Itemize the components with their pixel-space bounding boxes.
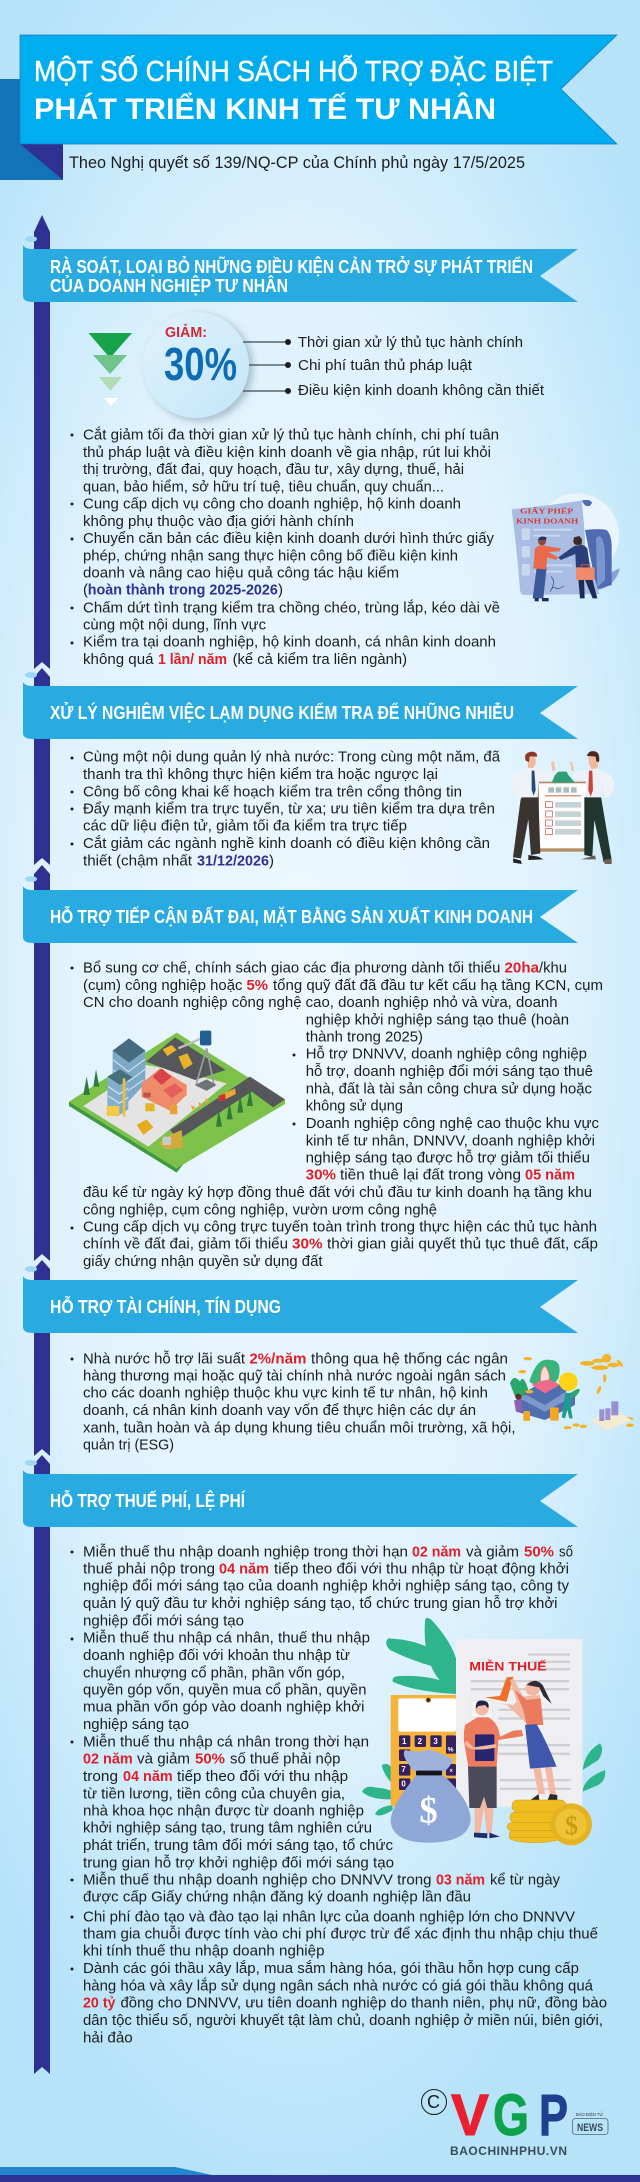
section 3 text block: nghiệp khởi nghiệp sáng tạo thuê (hoàn	[306, 1011, 569, 1028]
illustration: tax exemption: 0	[401, 1780, 406, 1789]
section 1 text block: không quá	[83, 651, 154, 668]
section 2 text block: Cắt giảm các ngành nghề kinh doanh có điều kiện không cần	[83, 835, 490, 852]
section 1 text block: Chuyển căn bản các điều kiện kinh doanh dưới hình thức giấy	[83, 530, 494, 547]
title ribbon	[0, 35, 617, 180]
section 3 text block	[70, 959, 603, 1270]
section 3 text block: chính về đất đai, giảm tối thiểu	[83, 1236, 288, 1253]
section 5 text block: 03 năm	[436, 1871, 485, 1888]
section 2 text block: )	[269, 852, 274, 869]
section 1 text block	[70, 427, 500, 668]
section 5 text block: nghiệp đổi mới sáng tạo	[83, 1612, 244, 1629]
section 5 text block: mua phần vốn góp vào doanh nghiệp khởi	[83, 1699, 364, 1716]
section 2 text block: Cùng một nội dung quản lý nhà nước: Trong cùng một năm, đã	[83, 749, 501, 766]
section 3 text block: (cụm) công nghiệp hoặc	[83, 977, 243, 994]
section 4 banner: HỖ TRỢ TÀI CHÍNH, TÍN DỤNG	[50, 1296, 281, 1317]
section 5 text block: từ tiền lương, tiền công của chuyên gia,	[83, 1785, 345, 1802]
section 5 text block: Miễn thuế thu nhập cá nhân, thuế thu nhập	[83, 1630, 370, 1647]
section 1 text block: quan, bảo hiểm, sở hữu trí tuệ, tiêu chuẩn, quy chuẩn...	[83, 478, 444, 495]
title ribbon: MỘT SỐ CHÍNH SÁCH HỖ TRỢ ĐẶC BIỆT	[34, 54, 553, 88]
illustration: tax exemption: $	[565, 1811, 578, 1840]
section 4 text block: thông qua hệ thống các ngân	[311, 1350, 508, 1367]
reduction list: Thời gian xử lý thủ tục hành chính	[298, 334, 523, 351]
section 2 text block: 31/12/2026	[197, 852, 269, 869]
section 5 banner: HỖ TRỢ THUẾ PHÍ, LỆ PHÍ	[50, 1490, 246, 1511]
section 5 text block: tiếp theo đối với thu nhập	[177, 1768, 348, 1785]
section 3 text block: thời gian giải quyết thủ tục thuê đất, cấp	[327, 1236, 598, 1253]
section 2 banner: XỬ LÝ NGHIÊM VIỆC LẠM DỤNG KIỂM TRA ĐỂ NHŨNG NHIỄU	[50, 702, 514, 723]
section 1 text block: 1 lần/ năm	[158, 651, 227, 668]
section 4 text block: doanh, cá nhân kinh doanh vay vốn để thực hiện các dự án	[83, 1402, 476, 1419]
section 5 text block: 02 năm	[83, 1751, 133, 1768]
section 5 text block: doanh nghiệp đối với khoản thu nhập từ	[83, 1647, 350, 1664]
section 5 text block: 04 năm	[123, 1768, 173, 1785]
section 3 text block: Cung cấp dịch vụ công trực tuyến toàn trình trong thực hiện các thủ tục hành	[83, 1219, 597, 1236]
callout: giảm 30%: 30%	[164, 338, 237, 390]
icon: green descending triangles	[88, 333, 132, 406]
section 5 text block: 50%	[195, 1751, 225, 1768]
logo: VGP News: P	[539, 2083, 568, 2148]
section 5 text block: trong	[83, 1768, 118, 1785]
section 5 text block: khởi nghiệp sáng tạo, trung tâm nghiên cứu	[83, 1820, 372, 1837]
callout: giảm 30%	[143, 312, 253, 421]
section 3 text block: 5%	[246, 977, 268, 994]
section 5 text block: thuế phải nộp trong	[83, 1560, 215, 1577]
section 4 text block: hàng thương mại hoặc quỹ tài chính nhà nước ngoài ngân sách	[83, 1368, 506, 1385]
section 3 text block: không sử dụng	[306, 1098, 403, 1115]
section 4 text block: cho các doanh nghiệp thuộc khu vực kinh tế tư nhân, hộ kinh	[83, 1385, 488, 1402]
section 5 text block: và giảm	[137, 1751, 190, 1768]
section 3 text block: /khu	[539, 959, 567, 976]
logo: VGP News: NEWS	[577, 2122, 603, 2134]
section 5 text block: đồng cho DNNVV, ưu tiên doanh nghiệp do thanh niên, phụ nữ, đồng bào	[120, 1995, 607, 2012]
section 3 text block: đầu kể từ ngày ký hợp đồng thuê đất với chủ đầu tư kinh doanh hạ tầng khu	[83, 1184, 592, 1201]
illustration: business licence handshake	[512, 493, 620, 601]
section 5 text block: Chi phí đào tạo và đào tạo lại nhân lực của doanh nghiệp lớn cho DNNVV	[83, 1908, 575, 1925]
section 3 text block: 30%	[306, 1167, 336, 1184]
section 1 text block: doanh và nâng cao hiệu quả công tác hậu kiểm	[83, 565, 399, 582]
illustration: two men with checklist	[511, 751, 614, 864]
logo: VGP News: C	[427, 2092, 440, 2112]
section 4 text block: 2%/năm	[249, 1350, 306, 1367]
section 5 text block: chuyển nhượng cổ phần, phần vốn góp,	[83, 1664, 345, 1681]
section 5 text block: dân tộc thiểu số, người khuyết tật làm chủ, doanh nghiệp ở miền núi, biên giới,	[83, 2012, 603, 2029]
section 5 text block: tiếp theo đối với thu nhập từ hoạt động khởi	[274, 1560, 569, 1577]
section 3 text block: 20ha	[504, 959, 540, 976]
section 3 text block: nghiệp sáng tạo được hỗ trợ giảm tối thiểu	[306, 1150, 590, 1167]
section 3 text block: CN cho doanh nghiệp công nghệ cao, doanh nghiệp nhỏ và vừa, doanh	[83, 994, 558, 1011]
reduction list	[243, 334, 545, 399]
section 5 text block: quyền góp vốn, quyền mua cổ phần, quyền	[83, 1681, 366, 1698]
section 5 text block: Miễn thuế thu nhập cá nhân trong thời hạn	[83, 1733, 369, 1750]
section 5 text block: khi tính thuế thu nhập doanh nghiệp	[83, 1943, 324, 1960]
section 5 text block: tham gia chuỗi được tính vào chi phí được trừ để xác định thu nhập chịu thuế	[83, 1926, 599, 1943]
section 3 text block: tiền thuê lại đất trong vòng	[340, 1167, 521, 1184]
illustration: tax exemption: 3	[433, 1737, 438, 1746]
section 2 text block	[70, 749, 501, 869]
section 3 text block: giấy chứng nhận quyền sử dụng đất	[83, 1253, 323, 1270]
section 5 text block: nghiệp đổi mới sáng tạo của doanh nghiệp khởi nghiệp sáng tạo, công ty	[83, 1578, 569, 1595]
section 2 text block: Công bố công khai kế hoạch kiểm tra trên cổng thông tin	[83, 783, 462, 800]
section 3 text block: tổng quỹ đất đã đầu tư kết cấu hạ tầng KCN, cụm	[273, 977, 603, 994]
section 1 text block: cùng một nội dung, lĩnh vực	[83, 617, 266, 634]
section 1 text block: thủ pháp luật và điều kiện kinh doanh về gia nhập, rút lui khỏi	[83, 444, 491, 461]
section 5 text block: kể từ ngày	[490, 1871, 560, 1888]
illustration: tax exemption	[362, 1618, 605, 1845]
section 1 text block: không phụ thuộc vào địa giới hành chính	[83, 513, 354, 530]
section 5 text block: trung gian hỗ trợ khởi nghiệp đối mới sáng tạo	[83, 1854, 394, 1871]
reduction list: Điều kiện kinh doanh không cần thiết	[298, 382, 545, 399]
section 5 text block	[70, 1543, 607, 2046]
section 2 text block: các dữ liệu điện tử, giảm tối đa kiểm tra trực tiếp	[83, 818, 407, 835]
illustration: tax exemption: %	[448, 1747, 454, 1754]
section 4 text block: xanh, tuần hoàn và áp dụng khung tiêu chuẩn môi trường, xã hội,	[83, 1419, 516, 1436]
section 5 text block: Miễn thuế thu nhập doanh nghiệp cho DNNVV trong	[83, 1871, 432, 1888]
section 1 text block: phép, chứng nhận sang thực hiện công bố điều kiện kinh	[83, 547, 458, 564]
section 2 text block: thiết (chậm nhất	[83, 852, 193, 869]
illustration: construction site	[69, 1031, 285, 1173]
illustration: tax exemption: 7	[401, 1765, 406, 1774]
section 5 text block: 50%	[524, 1543, 554, 1560]
section 4 banner	[23, 1266, 578, 1333]
logo: VGP News: V	[451, 2083, 489, 2148]
section 2 text block: thanh tra thì không thực hiện kiểm tra hoặc ngược lại	[83, 766, 438, 783]
logo: VGP News: G	[493, 2083, 529, 2148]
section 1 text block: (	[83, 582, 88, 599]
section 4 text block: quản trị (ESG)	[83, 1437, 174, 1454]
section 5 text block: số	[559, 1543, 574, 1560]
section 1 text block: Chấm dứt tình trạng kiểm tra chồng chéo, trùng lắp, kéo dài về	[83, 599, 500, 616]
section 1 banner	[23, 236, 578, 302]
illustration: tax exemption: 2	[418, 1737, 423, 1746]
section 3 text block: kinh tế tư nhân, DNNVV, doanh nghiệp khởi	[306, 1132, 595, 1149]
footer band	[0, 2167, 640, 2182]
section 2 text block: Đẩy mạnh kiểm tra trực tuyến, từ xa; ưu tiên kiểm tra dựa trên	[83, 800, 495, 817]
section 1 text block: (kể cả kiểm tra liên ngành)	[233, 651, 407, 668]
logo: VGP News: BAOCHINHPHU.VN	[450, 2144, 567, 2158]
section 5 text block: hàng hóa và xây lắp sử dụng ngân sách nhà nước có giá gói thầu không quá	[83, 1977, 594, 1994]
title ribbon: PHÁT TRIỂN KINH TẾ TƯ NHÂN	[34, 92, 496, 126]
illustration: business licence handshake: KINH DOANH	[516, 517, 578, 526]
illustration: tax exemption: 1	[402, 1737, 407, 1746]
section 1 text block: thị trường, đất đai, quy hoạch, đầu tư, xây dựng, thuế, hải	[83, 461, 464, 478]
section 5 text block: được cấp Giấy chứng nhận đăng ký doanh nghiệp lần đầu	[83, 1889, 471, 1906]
section 5 text block: nghiệp sáng tạo	[83, 1716, 189, 1733]
section 3 text block: công nghiệp, cụm công nghiệp, vườn ươm công nghệ	[83, 1201, 437, 1218]
section 1 banner: RÀ SOÁT, LOẠI BỎ NHỮNG ĐIỀU KIỆN CẢN TRỞ SỰ PHÁT TRIỂN	[50, 256, 533, 277]
section 5 text block: 02 năm	[412, 1543, 461, 1560]
timeline bar	[34, 215, 50, 2074]
section 4 text block	[70, 1350, 516, 1454]
illustration: business licence handshake: GIẤY PHÉP	[520, 505, 574, 515]
section 3 text block: thành trong 2025)	[306, 1029, 423, 1046]
section 5 banner	[23, 1460, 578, 1527]
logo: VGP News: BÁO ĐIỆN TỬ	[576, 2110, 603, 2117]
section 5 text block: nhà khoa học nhận được từ doanh nghiệp	[83, 1802, 364, 1819]
section 3 text block: 05 năm	[525, 1167, 575, 1184]
section 4 text block: Nhà nước hỗ trợ lãi suất	[83, 1350, 246, 1367]
section 5 text block: hải đảo	[83, 2029, 133, 2046]
section 1 text block: hoàn thành trong 2025-2026	[88, 582, 278, 599]
illustration: tax exemption: $	[419, 1790, 438, 1831]
section 1 text block: )	[278, 582, 283, 599]
section 1 text block: Cắt giảm tối đa thời gian xử lý thủ tục hành chính, chi phí tuân	[83, 427, 499, 444]
section 5 text block: quản lý quỹ đầu tư khởi nghiệp sáng tạo, tổ chức trung gian hỗ trợ khởi	[83, 1595, 558, 1612]
section 3 text block: hỗ trợ, doanh nghiệp đổi mới sáng tạo thuê	[306, 1063, 593, 1080]
callout: giảm 30%: GIẢM:	[165, 324, 207, 341]
reduction list: Chi phí tuân thủ pháp luật	[298, 357, 473, 374]
section 2 banner	[23, 672, 578, 739]
section 3 banner	[23, 876, 578, 943]
section 5 text block: 20 tỷ	[83, 1995, 116, 2012]
section 1 text block: Cung cấp dịch vụ công cho doanh nghiệp, hộ kinh doanh	[83, 496, 461, 513]
section 5 text block: và giảm	[466, 1543, 519, 1560]
section 5 text block: phát triển, trung tâm đổi mới sáng tạo, tổ chức	[83, 1837, 393, 1854]
section 3 text block: nhà, đất là tài sản công chưa sử dụng hoặc	[306, 1080, 592, 1097]
section 5 text block: Dành các gói thầu xây lắp, mua sắm hàng hóa, gói thầu hỗn hợp cung cấp	[83, 1960, 579, 1977]
illustration: tax exemption: ×	[449, 1769, 453, 1775]
logo: VGP News	[422, 2083, 608, 2158]
subtitle: Theo Nghị quyết số 139/NQ-CP của Chính phủ ngày 17/5/2025	[69, 154, 525, 172]
section 3 text block: 30%	[292, 1236, 322, 1253]
section 1 banner: CỦA DOANH NGHIỆP TƯ NHÂN	[50, 275, 288, 296]
illustration: coins and books	[510, 1354, 634, 1431]
section 3 text block: Doanh nghiệp công nghệ cao thuộc khu vực	[306, 1115, 599, 1132]
section 5 text block: Miễn thuế thu nhập doanh nghiệp trong thời hạn	[83, 1543, 408, 1560]
section 3 banner: HỖ TRỢ TIẾP CẬN ĐẤT ĐAI, MẶT BẰNG SẢN XUẤT KINH DOANH	[50, 906, 533, 927]
section 5 text block: 04 năm	[219, 1560, 269, 1577]
section 3 text block: Bổ sung cơ chế, chính sách giao các địa phương dành tối thiểu	[83, 959, 500, 976]
section 5 text block: số thuế phải nộp	[230, 1751, 340, 1768]
illustration: tax exemption: MIỄN THUẾ	[469, 1659, 547, 1674]
section 1 text block: Kiểm tra tại doanh nghiệp, hộ kinh doanh, cá nhân kinh doanh	[83, 634, 496, 651]
section 3 text block: Hỗ trợ DNNVV, doanh nghiệp công nghiệp	[306, 1046, 587, 1063]
